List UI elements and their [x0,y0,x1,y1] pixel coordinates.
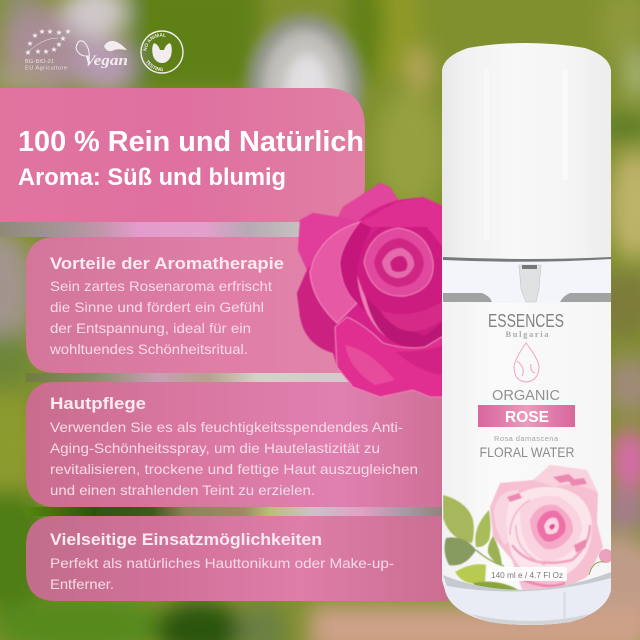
lower left lobe [297,270,337,353]
heading: Hautpflege [50,394,146,413]
icon: EU organic leaf logo: ★ [25,48,32,57]
text: species: Rosa damascena [494,434,559,443]
heading: Vorteile der Aromatherapie [50,254,284,273]
spiral outer [364,228,433,296]
panel: versatile uses [26,516,447,601]
body text [50,419,418,498]
top right petal [358,197,445,250]
back silhouette [297,183,445,397]
title: 100 % Rein und Natürlich [18,126,364,158]
label [443,302,613,602]
body text [50,555,394,592]
panel: aromatherapy [26,237,400,373]
illustration: magenta rose [297,183,445,397]
text: FLORAL WATER: FLORAL WATER [480,445,575,460]
subtitle: Aroma: Süß und blumig [18,164,286,191]
icon: EU organic leaf logo: ★ [56,40,63,49]
body text: der Entspannung, ideal für ein [50,320,251,336]
body text [49,278,272,357]
body text: Sein zartes Rosenaroma erfrischt [50,278,272,294]
icon: rose drop [514,343,539,382]
icon: EU organic leaf logo: ★ [39,27,46,36]
body text: die Sinne und fördert ein Gefühl [50,299,264,315]
panel: skin care [26,382,443,507]
bowl [357,227,445,338]
icon: EU organic leaf logo: ★ [27,39,34,48]
body text: revitalisieren, trockene und fettige Haut auszugleichen [50,461,418,477]
label: ROSE band: ROSE [505,409,549,426]
body text: und einen strahlenden Teint zu erzielen. [50,482,315,498]
spray nozzle [519,265,541,302]
lower liquid [442,570,611,625]
front petal [335,317,445,397]
white glow arch [247,15,363,155]
icon: EU organic leaf logo: ★ [47,27,54,36]
heading: Vielseitige Einsatzmöglichkeiten [50,530,322,549]
icon: no animal testing badge: NO ANIMAL [143,33,166,51]
body text: wohltuendes Schönheitsritual. [49,341,248,357]
top back petal [338,183,398,222]
icon: EU organic leaf logo: ★ [65,27,72,36]
illustration: leaves [443,495,522,592]
icon: EU organic leaf logo: ★ [51,45,58,54]
icon: vegan logo: Vegan [84,53,128,69]
icon: EU organic leaf logo: ★ [60,34,67,43]
illustration: rose bud [589,549,613,575]
icon: EU organic leaf logo: ★ [32,31,39,40]
big left petal [310,222,360,323]
icon: EU organic leaf logo [25,27,72,72]
icon: EU organic leaf logo: ★ [43,47,50,56]
product: bottle [442,40,613,640]
text: brand logo: ESSENCES [488,311,564,331]
text: volume [488,567,567,581]
icon: EU organic leaf logo: EU Agriculture [25,66,67,72]
text: brand logo: Bulgaria [506,329,549,339]
text: ORGANIC: ORGANIC [492,387,560,404]
label: ROSE band [478,405,575,427]
text: brand logo [489,314,564,339]
bowl lower lip [357,275,425,341]
strips of background visible between panels [0,222,446,516]
icon: no animal testing badge [140,30,184,74]
dark inner left [340,222,372,318]
cap [442,40,612,258]
body text: Aging-Schönheitsspray, um die Hautelastizität zu [50,440,380,456]
bottle glass window [442,250,612,640]
back left petal [298,213,358,270]
body text: Perfekt als natürliches Hauttonikum oder Make-up- [50,555,394,571]
illustration: pale rose [490,465,603,592]
icon: EU organic leaf logo: BG-BIO-21 [25,59,54,65]
icon: EU organic leaf logo: ★ [35,47,42,56]
panel: headline [0,88,365,222]
certification logos [25,27,184,74]
body text: Verwenden Sie es als feuchtigkeitsspendendes Anti- [50,419,403,435]
text: volume: 140 ml e / 4.7 Fl Oz [491,570,563,580]
icon: vegan logo [76,41,128,69]
icon: EU organic leaf logo: ★ [56,28,63,37]
icon: no animal testing badge: TESTING [146,60,163,71]
body text: Entferner. [50,576,114,592]
